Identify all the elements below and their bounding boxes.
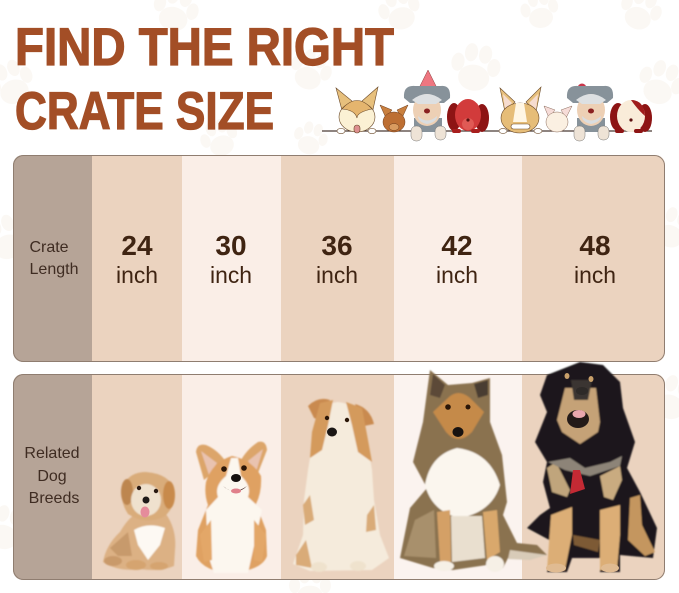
row heading: related dog breeds: Dog [37,468,67,485]
icon: schnauzer with flower [567,84,613,141]
panel: crate length [13,155,665,362]
icon: schnauzer with party hat [404,70,450,141]
size: 24 inch: 24 [121,230,153,261]
icon: shiba dog [336,87,378,134]
dog photo: small fluffy puppy [103,472,175,570]
size: 42 inch: inch [436,262,478,288]
icon: chihuahua [380,105,408,132]
dog photo: tibetan mastiff [527,362,657,572]
row heading: crate length [29,239,78,278]
size: 24 inch: inch [116,262,158,288]
row heading: crate length: Crate [29,239,69,256]
dog photo: rough collie [400,370,547,572]
dog photo: corgi [196,442,267,573]
cartoon dogs row [322,70,652,141]
icon: white and red spaniel [610,100,652,133]
row heading: crate length: Length [30,261,78,278]
icon: corgi with bone [499,87,542,133]
title [15,18,394,141]
size: 36 inch [316,230,358,288]
size: 42 inch [436,230,478,288]
row heading: related dog breeds: Related [24,445,80,462]
size: 48 inch [574,230,616,288]
panel: related dog breeds [13,362,665,580]
size: 48 inch: inch [574,262,616,288]
size: 48 inch: 48 [579,230,611,261]
title: CRATE SIZE [15,82,274,141]
size: 36 inch: 36 [321,230,353,261]
dog photo: golden border collie [293,399,389,572]
size: 42 inch: 42 [441,230,473,261]
title: FIND THE RIGHT [15,18,394,77]
row heading: related dog breeds [24,445,80,507]
size: 30 inch: inch [210,262,252,288]
size: 36 inch: inch [316,262,358,288]
size: 30 inch: 30 [215,230,247,261]
row heading: related dog breeds: Breeds [29,490,79,507]
size: 30 inch [210,230,252,288]
size: 24 inch [116,230,158,288]
icon: red dog [447,99,489,133]
icon: white chihuahua [544,106,572,132]
